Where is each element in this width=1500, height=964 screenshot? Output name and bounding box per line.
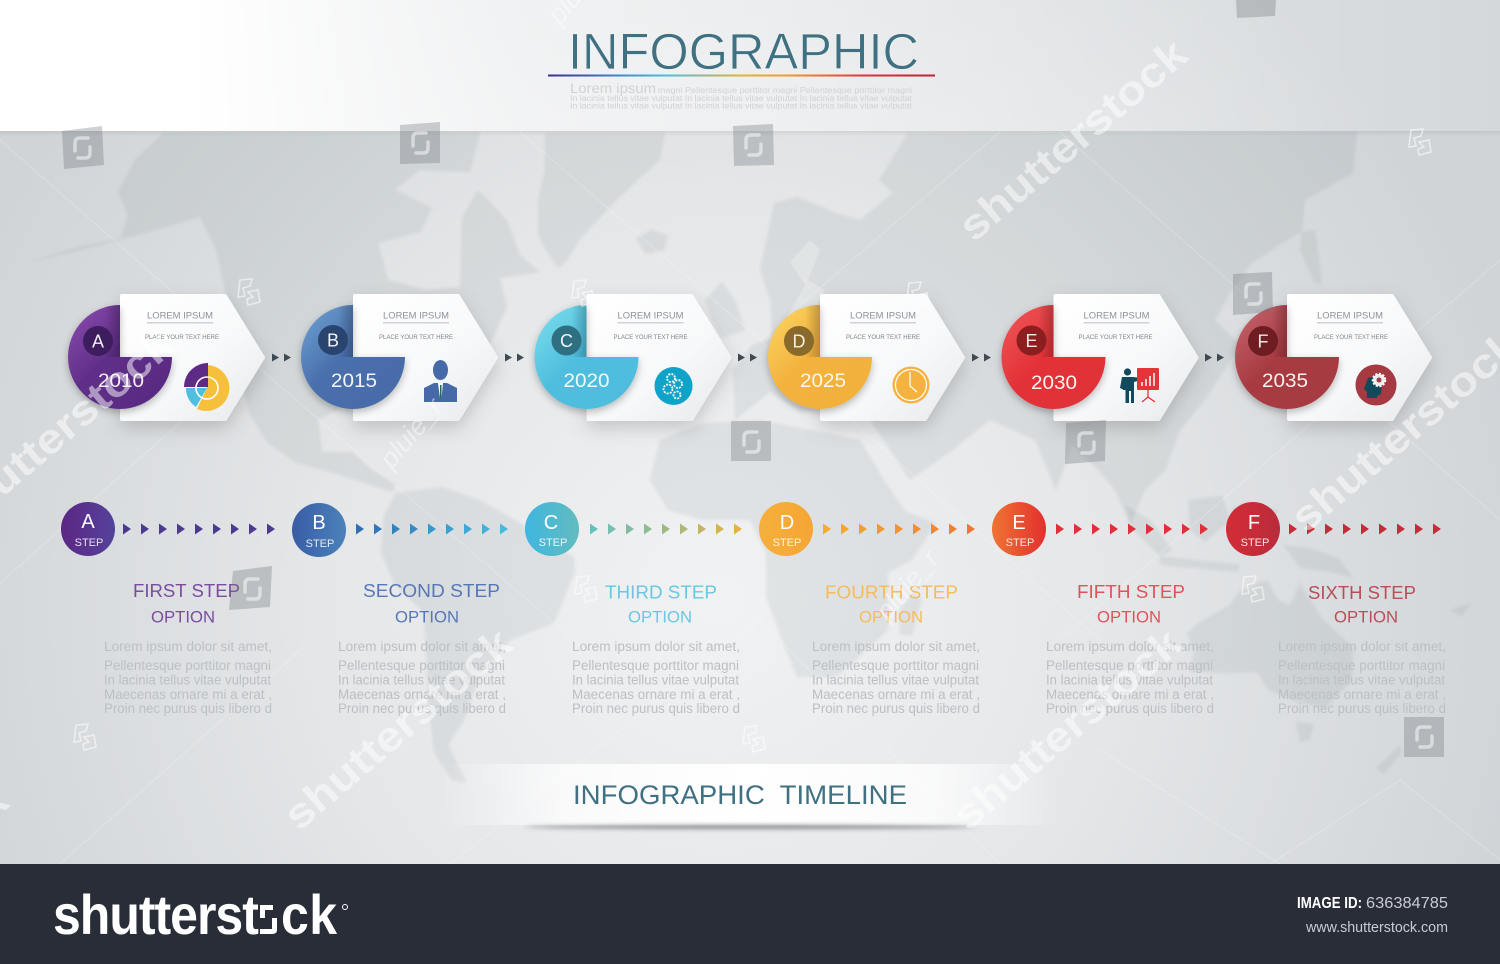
step text: fifth: In lacinia tellus vitae vulputat [1046,672,1213,688]
shutterstock watermarks: shutterstock [949,29,1196,250]
map: iceland [636,230,668,254]
card A 2010: PLACE YOUR TEXT HERE [145,335,219,341]
step text: fifth [1046,582,1214,716]
baltic sea [785,240,825,330]
step badge A: A [81,511,95,533]
title: INFOGRAPHIC [568,23,919,80]
icon: clock [892,366,930,404]
card D 2025 [768,296,963,419]
step text: first: In lacinia tellus vitae vulputat [104,672,271,688]
map: indonesia [1125,496,1278,572]
title sub text [570,81,913,110]
step badge A: STEP [75,537,103,549]
step badge E: STEP [1006,537,1034,549]
shutterstock watermarks: shutterstock [1281,320,1500,541]
world map [30,132,1470,783]
step text: fourth: In lacinia tellus vitae vulputat [812,672,979,688]
card A 2010: LOREM IPSUM [147,310,213,322]
card E 2030: PLACE YOUR TEXT HERE [1078,335,1152,341]
map: greenland [538,133,665,268]
step badge F: STEP [1241,537,1269,549]
card D 2025: LOREM IPSUM [850,310,916,322]
step badge C: C [544,512,558,534]
top title band [0,0,1500,131]
step text: sixth: Pellentesque porttitor magni [1278,658,1445,673]
step badge C: STEP [539,537,567,549]
card E 2030: 2030 [1031,373,1077,394]
footer logo: o [258,884,288,947]
icon: donut chart [184,363,229,411]
shutterstock watermarks: shutterstock [274,618,521,839]
faint diagonal watermark lines [0,132,1500,864]
step text: first: Lorem ipsum dolor sit amet, [104,639,272,654]
icon: gears [654,367,692,405]
step text: sixth: SIXTH STEP [1308,583,1416,603]
step text: fifth: OPTION [1097,608,1161,626]
card E 2030: LOREM IPSUM [1084,310,1150,322]
step text: fourth: Lorem ipsum dolor sit amet, [812,639,980,654]
footer logo [53,884,348,947]
footer image id: 636384785 [1366,895,1448,912]
step badge B: STEP [306,538,334,550]
step text: third: Lorem ipsum dolor sit amet, [572,639,740,654]
step text: second: Maecenas ornare mi a erat , [338,687,506,702]
bottom banner [440,764,1060,829]
step text: fifth: Proin nec purus quis libero d [1046,701,1214,716]
step text: fifth: FIFTH STEP [1077,582,1185,602]
card E 2030 [1002,296,1196,419]
card D 2025: 2025 [800,371,846,392]
map: australia [1187,580,1353,708]
step text: third: Proin nec purus quis libero d [572,701,740,716]
step text: third: Maecenas ornare mi a erat , [572,687,740,702]
contributor watermarks [373,0,945,627]
step text: sixth: Maecenas ornare mi a erat , [1278,687,1446,702]
step text: sixth: In lacinia tellus vitae vulputat [1278,672,1445,688]
step text: second: Lorem ipsum dolor sit amet, [338,639,506,654]
step text: fourth: FOURTH STEP [825,582,958,602]
card E 2030: E [1025,331,1038,351]
contributor watermarks: pluie_r [373,392,449,475]
arrow row D [823,524,975,534]
step text: fifth: Maecenas ornare mi a erat , [1046,687,1214,702]
footer logo: shutterst [53,884,259,947]
card C 2020: PLACE YOUR TEXT HERE [614,335,688,341]
map: japan [1250,318,1296,366]
card D 2025: D [792,332,806,352]
shutterstock watermarks: shutterstock [943,618,1190,839]
map: new zealand [1376,604,1470,774]
step text: second: In lacinia tellus vitae vulputat [338,672,505,688]
step text: second [338,581,506,716]
step text: third: OPTION [628,608,692,626]
card A 2010: A [92,332,104,352]
map: eurasia [733,132,1357,525]
step text: first: FIRST STEP [133,581,240,601]
card F 2035: F [1258,332,1268,352]
map: tasmania [1296,722,1314,742]
card A 2010 [68,296,263,419]
step text: first: Pellentesque porttitor magni [104,658,271,673]
step text: second: OPTION [395,608,459,626]
step badge B [292,503,346,557]
step text: first [104,581,272,716]
step badge D: STEP [773,537,801,549]
band shadow [0,131,1500,136]
card B 2015: PLACE YOUR TEXT HERE [379,335,453,341]
footer bar [0,864,1500,964]
step badge B: B [312,512,326,534]
step text: fourth: Maecenas ornare mi a erat , [812,687,980,702]
icon: head with gear [1356,364,1396,406]
step text: second: SECOND STEP [363,581,500,601]
step text: second: Proin nec purus quis libero d [338,701,506,716]
card C 2020: C [560,331,573,351]
icon: presenter with chart board [1120,368,1159,403]
step text: first: Proin nec purus quis libero d [104,701,272,716]
step text: fifth: Lorem ipsum dolor sit amet, [1046,639,1214,654]
step text: sixth: Lorem ipsum dolor sit amet, [1278,639,1446,654]
step badge F: F [1248,512,1260,534]
map: africa [650,420,936,677]
step text: fifth: Pellentesque porttitor magni [1046,658,1213,673]
step text: fourth: OPTION [859,608,923,626]
step text: first: OPTION [151,608,215,626]
step badge D: D [780,512,794,534]
map: south america [381,487,575,783]
card B 2015 [301,296,496,419]
card A 2010: 2010 [98,371,144,392]
title sub text: In lacinia tellus vitae vulputat In lacinia tellus vitae vulputat In lacinia tellus vitae vulputat [570,102,913,110]
step text: fourth [812,582,980,716]
arrow row F [1289,524,1441,534]
map: british isles [705,282,745,338]
arrow row E [1056,524,1208,534]
arrow row A [123,524,275,534]
step badge D [759,502,813,556]
footer logo: ck [281,884,338,947]
map: new guinea [1283,545,1354,578]
step text: second: Pellentesque porttitor magni [338,658,505,673]
rainbow underline [548,74,935,76]
step text: fourth: Proin nec purus quis libero d [812,701,980,716]
step text: sixth: OPTION [1334,608,1398,626]
map: north america [30,132,540,492]
step badge E: E [1012,512,1026,534]
step text: third: THIRD STEP [605,582,717,602]
card D 2025: PLACE YOUR TEXT HERE [846,335,920,341]
title sub text: In lacinia tellus vitae vulputat In lacinia tellus vitae vulputat In lacinia tellus vitae vulputat [570,94,913,103]
footer image id [1297,895,1448,936]
step text: fourth: Pellentesque porttitor magni [812,658,979,673]
step text: third: Pellentesque porttitor magni [572,658,739,673]
step badge C [525,502,579,556]
card F 2035: 2035 [1262,371,1308,392]
card B 2015: 2015 [331,371,377,392]
title sub text: magni Pellentesque porttitor magni Pellentesque porttitor magni [658,86,912,95]
footer image id: www.shutterstock.com [1305,920,1448,936]
card F 2035: LOREM IPSUM [1317,310,1383,322]
card C 2020 [534,296,730,419]
card F 2035: PLACE YOUR TEXT HERE [1314,335,1388,341]
footer image id: IMAGE ID: [1297,895,1362,912]
step text: sixth: Proin nec purus quis libero d [1278,701,1446,716]
step badge E [992,502,1046,556]
step text: third [572,582,740,716]
step badge A [61,502,115,556]
icon: business person [424,360,457,402]
step text: sixth [1278,583,1446,716]
arrow row B [356,524,508,534]
card C 2020: 2020 [564,371,610,392]
arrow row C [590,524,742,534]
card B 2015: B [327,330,339,350]
step text: first: Maecenas ornare mi a erat , [104,687,272,702]
map: madagascar [899,593,922,636]
connector arrows between cards [272,354,1224,362]
bottom banner: INFOGRAPHIC TIMELINE [573,780,907,810]
card B 2015: LOREM IPSUM [383,310,449,322]
card F 2035 [1235,296,1430,419]
step text: third: In lacinia tellus vitae vulputat [572,672,739,688]
card C 2020: LOREM IPSUM [618,310,684,322]
title sub text: Lorem ipsum [570,81,656,96]
watermark logo squares [62,0,1444,757]
contributor watermarks: pluie_r [869,544,945,627]
step badge F [1226,502,1280,556]
